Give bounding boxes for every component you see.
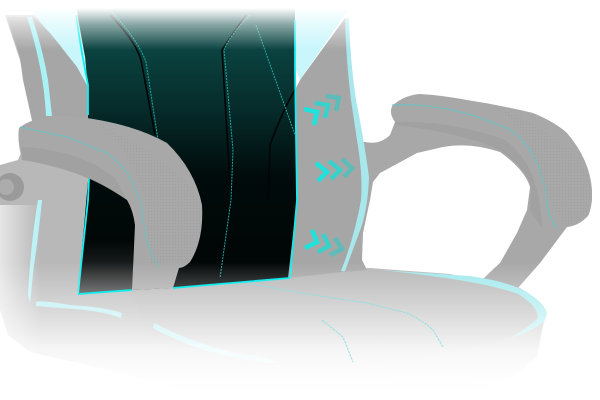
arrows: bottom — [305, 230, 342, 255]
right light cyan panel — [295, 10, 348, 80]
left armrest — [0, 116, 203, 290]
right panel bright edge — [290, 20, 297, 278]
top fade — [0, 0, 600, 50]
armrest perforation — [500, 108, 592, 226]
left wing leather — [7, 17, 88, 125]
panel dark seams — [110, 15, 295, 200]
arrows: middle — [316, 159, 352, 181]
left back wing — [7, 10, 89, 294]
left panel bright edge — [76, 15, 89, 294]
seat lower edge shade — [360, 320, 544, 380]
left wing cyan strip — [27, 17, 52, 116]
seat — [132, 270, 547, 380]
right back wing — [288, 10, 369, 278]
left light cyan panel — [30, 10, 88, 90]
left armrest stitching — [20, 127, 158, 267]
right armrest — [345, 94, 592, 288]
armrest lower shadow — [22, 147, 127, 200]
armrest pad — [18, 116, 202, 290]
armrest knob — [0, 173, 24, 201]
armrest stitching — [392, 105, 558, 228]
arrows: top — [304, 96, 339, 125]
armrest perforation — [100, 125, 203, 265]
armrest inner shading — [395, 122, 542, 228]
bottom fade — [0, 262, 600, 395]
right wing cyan strip — [341, 18, 369, 271]
seat top cyan rim — [380, 270, 547, 338]
panel stitching — [112, 12, 295, 278]
left edge fade — [0, 205, 40, 395]
seat stitching — [248, 283, 443, 362]
lower left sheen — [78, 240, 133, 294]
right wing leather — [288, 18, 367, 278]
lower left cyan strips — [28, 200, 278, 363]
dark back panel — [75, 0, 297, 294]
bright panel bottom edge — [78, 278, 290, 294]
